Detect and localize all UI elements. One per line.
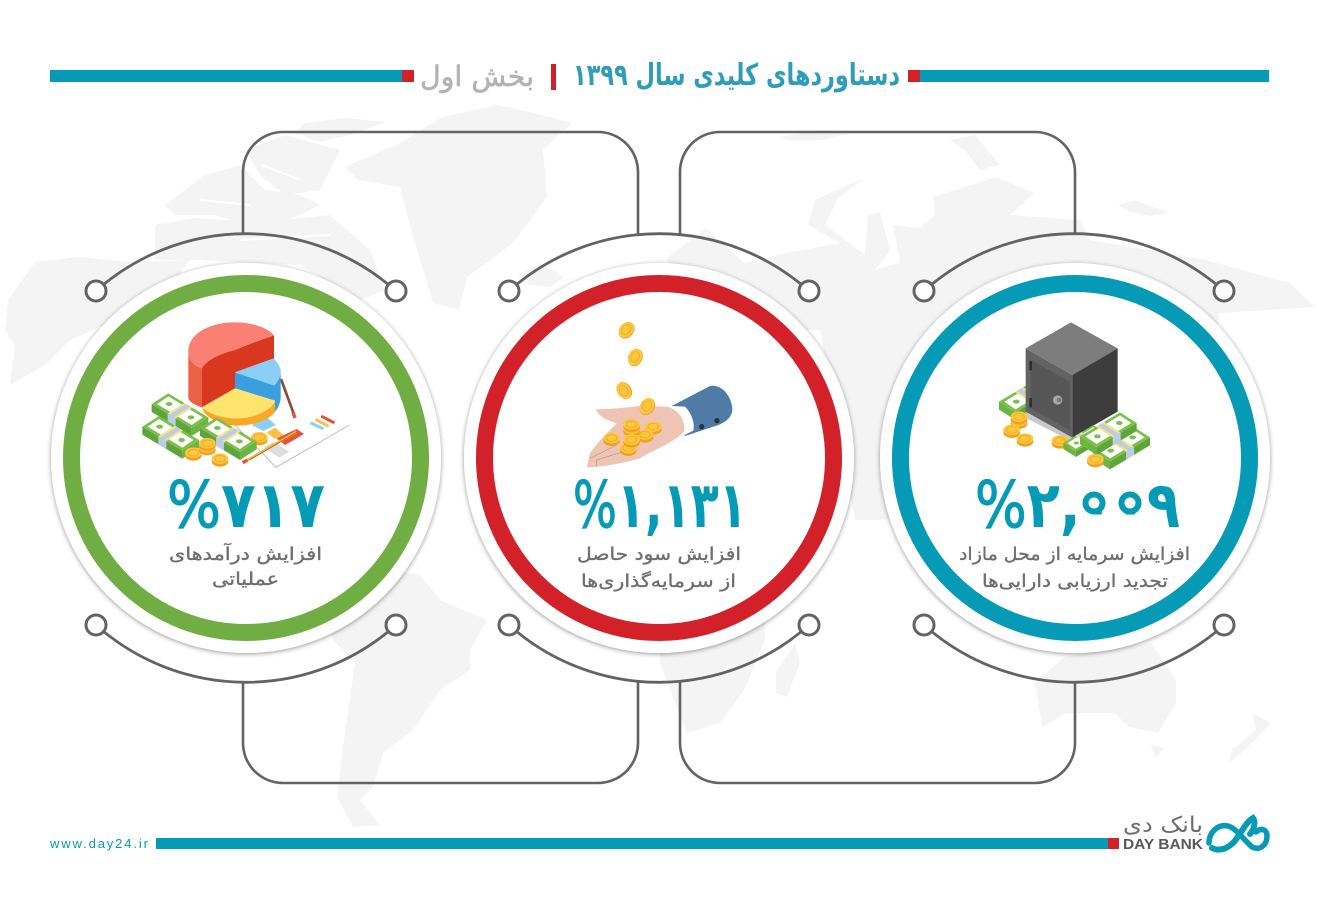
disc — [880, 263, 1270, 653]
background world map — [5, 105, 1315, 827]
website url: www.day24.ir — [49, 836, 149, 851]
icon: hand with coins — [587, 319, 732, 467]
green ring — [72, 284, 420, 632]
blue ring — [900, 284, 1250, 632]
red ring — [484, 284, 834, 632]
caption — [577, 544, 741, 592]
caption — [959, 544, 1190, 592]
logo: day bank — [1123, 813, 1267, 853]
logo persian name: بانک دی — [1123, 813, 1203, 838]
figure: 1,131 percent: %۱,۱۳۱ — [573, 469, 747, 543]
header bar right — [908, 70, 1269, 82]
logo symbol — [1209, 818, 1267, 850]
connector frame: right rounded rectangle — [680, 132, 1075, 783]
disc — [464, 263, 854, 653]
subtitle: بخش اول — [420, 60, 534, 93]
logo latin name: DAY BANK — [1123, 836, 1203, 853]
panel: investment profit — [464, 234, 854, 682]
panel: operating revenue — [51, 234, 441, 682]
caption: افزایش سود حاصل — [577, 544, 741, 565]
caption: افزایش درآمدهای — [169, 542, 322, 565]
caption: تجدید ارزیابی دارایی‌ها — [982, 571, 1168, 592]
title: دستاوردهای کلیدی سال ۱۳۹۹ — [573, 58, 900, 93]
header bar left — [50, 70, 414, 82]
arcs and nodes — [86, 234, 406, 682]
arcs and nodes — [914, 234, 1234, 682]
caption: عملیاتی — [212, 569, 279, 590]
caption: افزایش سرمایه از محل مازاد — [959, 544, 1190, 565]
connector frame: left rounded rectangle — [243, 132, 638, 783]
icon: pie chart and money — [142, 322, 349, 467]
caption — [169, 542, 322, 590]
caption: از سرمایه‌گذاری‌ها — [581, 570, 736, 592]
icon: safe with money — [999, 322, 1150, 469]
figure: 2,009 percent: %۲,۰۰۹ — [975, 469, 1180, 543]
disc — [51, 263, 441, 653]
footer bar — [156, 838, 1119, 849]
panel: capital increase — [880, 234, 1270, 682]
figure: 717 percent: %۷۱۷ — [167, 469, 325, 543]
arcs and nodes — [499, 234, 819, 682]
divider — [551, 64, 556, 90]
